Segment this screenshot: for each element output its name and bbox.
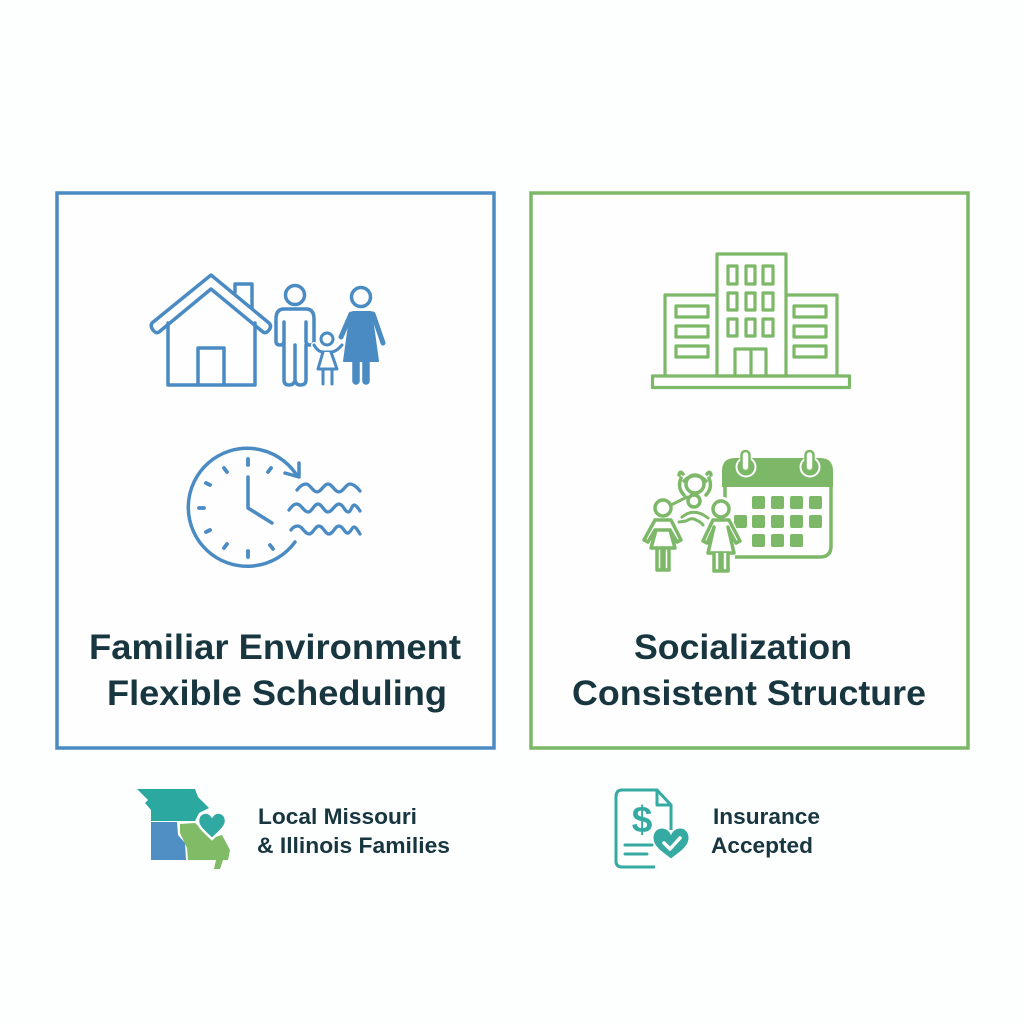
label: local missouri and illinois families: Local Missouri (258, 804, 417, 829)
icon: waves (289, 484, 360, 534)
label: insurance accepted (711, 804, 820, 858)
heading: socialization, consistent structure: Consistent Structure (572, 674, 926, 713)
heading: familiar environment, flexible scheduling (89, 628, 461, 713)
icon: insurance document (616, 790, 689, 867)
icon: child (314, 333, 342, 384)
heading: familiar environment, flexible scheduling: Flexible Scheduling (107, 674, 447, 713)
icon: mother (341, 288, 383, 381)
icon: insurance document: $ (632, 799, 653, 840)
label: insurance accepted: Insurance (713, 804, 820, 829)
callout: local families (137, 789, 450, 869)
icon: right child (702, 499, 740, 571)
label: local missouri and illinois families (257, 804, 450, 858)
callout: insurance accepted (616, 790, 820, 867)
icon: top child (679, 472, 711, 525)
icon: family (276, 286, 383, 385)
icon: left child (644, 497, 687, 570)
icon: clock face (188, 448, 299, 566)
icon: children (644, 472, 740, 571)
panel: socialization and consistent structure (531, 193, 968, 748)
icon: house (151, 275, 270, 385)
icon: calendar (722, 451, 833, 557)
panel: familiar environment and flexible scheduling (57, 193, 494, 748)
heading: socialization, consistent structure (572, 628, 926, 713)
label: local missouri and illinois families: & Illinois Families (257, 833, 450, 858)
heading: familiar environment, flexible scheduling: Familiar Environment (89, 628, 461, 667)
label: insurance accepted: Accepted (711, 833, 813, 858)
icon: clock with arrow and waves (188, 448, 360, 566)
icon: father (276, 286, 314, 385)
icon: missouri and illinois map (137, 789, 230, 869)
heading: socialization, consistent structure: Socialization (634, 628, 852, 667)
icon: school building (652, 254, 850, 388)
